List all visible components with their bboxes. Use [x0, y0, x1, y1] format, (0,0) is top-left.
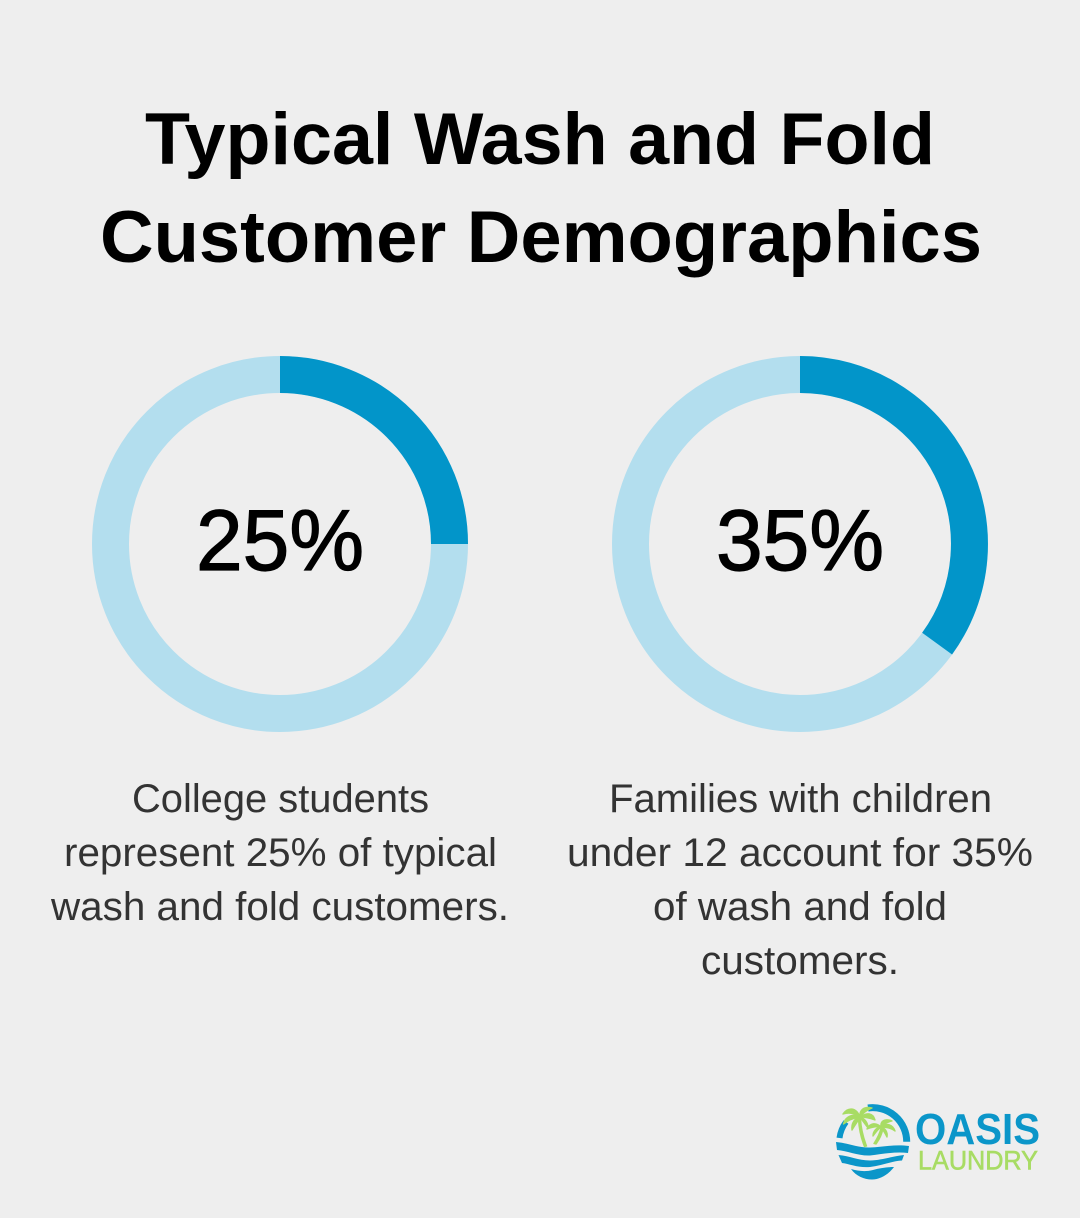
description: college students [50, 777, 509, 929]
donut chart: 25% [110, 374, 450, 714]
description: families with children: under 12 account for 35% [567, 831, 1033, 875]
logo: Oasis Laundry [836, 1105, 1040, 1180]
description: families with children [567, 777, 1033, 983]
title: Typical Wash and Fold [145, 99, 935, 180]
description: families with children: Families with children [609, 777, 992, 821]
title [100, 99, 982, 278]
description: college students: wash and fold customers. [50, 885, 509, 929]
panel: college students [50, 374, 509, 929]
wordmark: LAUNDRY: LAUNDRY [918, 1146, 1038, 1176]
title: Customer Demographics [100, 197, 982, 278]
stat: 25%: 25% [196, 493, 364, 589]
icon: palm trees and waves [836, 1107, 909, 1180]
description: families with children: customers. [701, 939, 899, 983]
description: college students: College students [132, 777, 429, 821]
panel: families with children [567, 374, 1033, 983]
stat: 35%: 35% [716, 493, 884, 589]
description: college students: represent 25% of typical [64, 831, 497, 875]
description: families with children: of wash and fold [653, 885, 947, 929]
wordmark: OASIS: OASIS [915, 1105, 1040, 1154]
donut chart: 35% [630, 374, 970, 714]
